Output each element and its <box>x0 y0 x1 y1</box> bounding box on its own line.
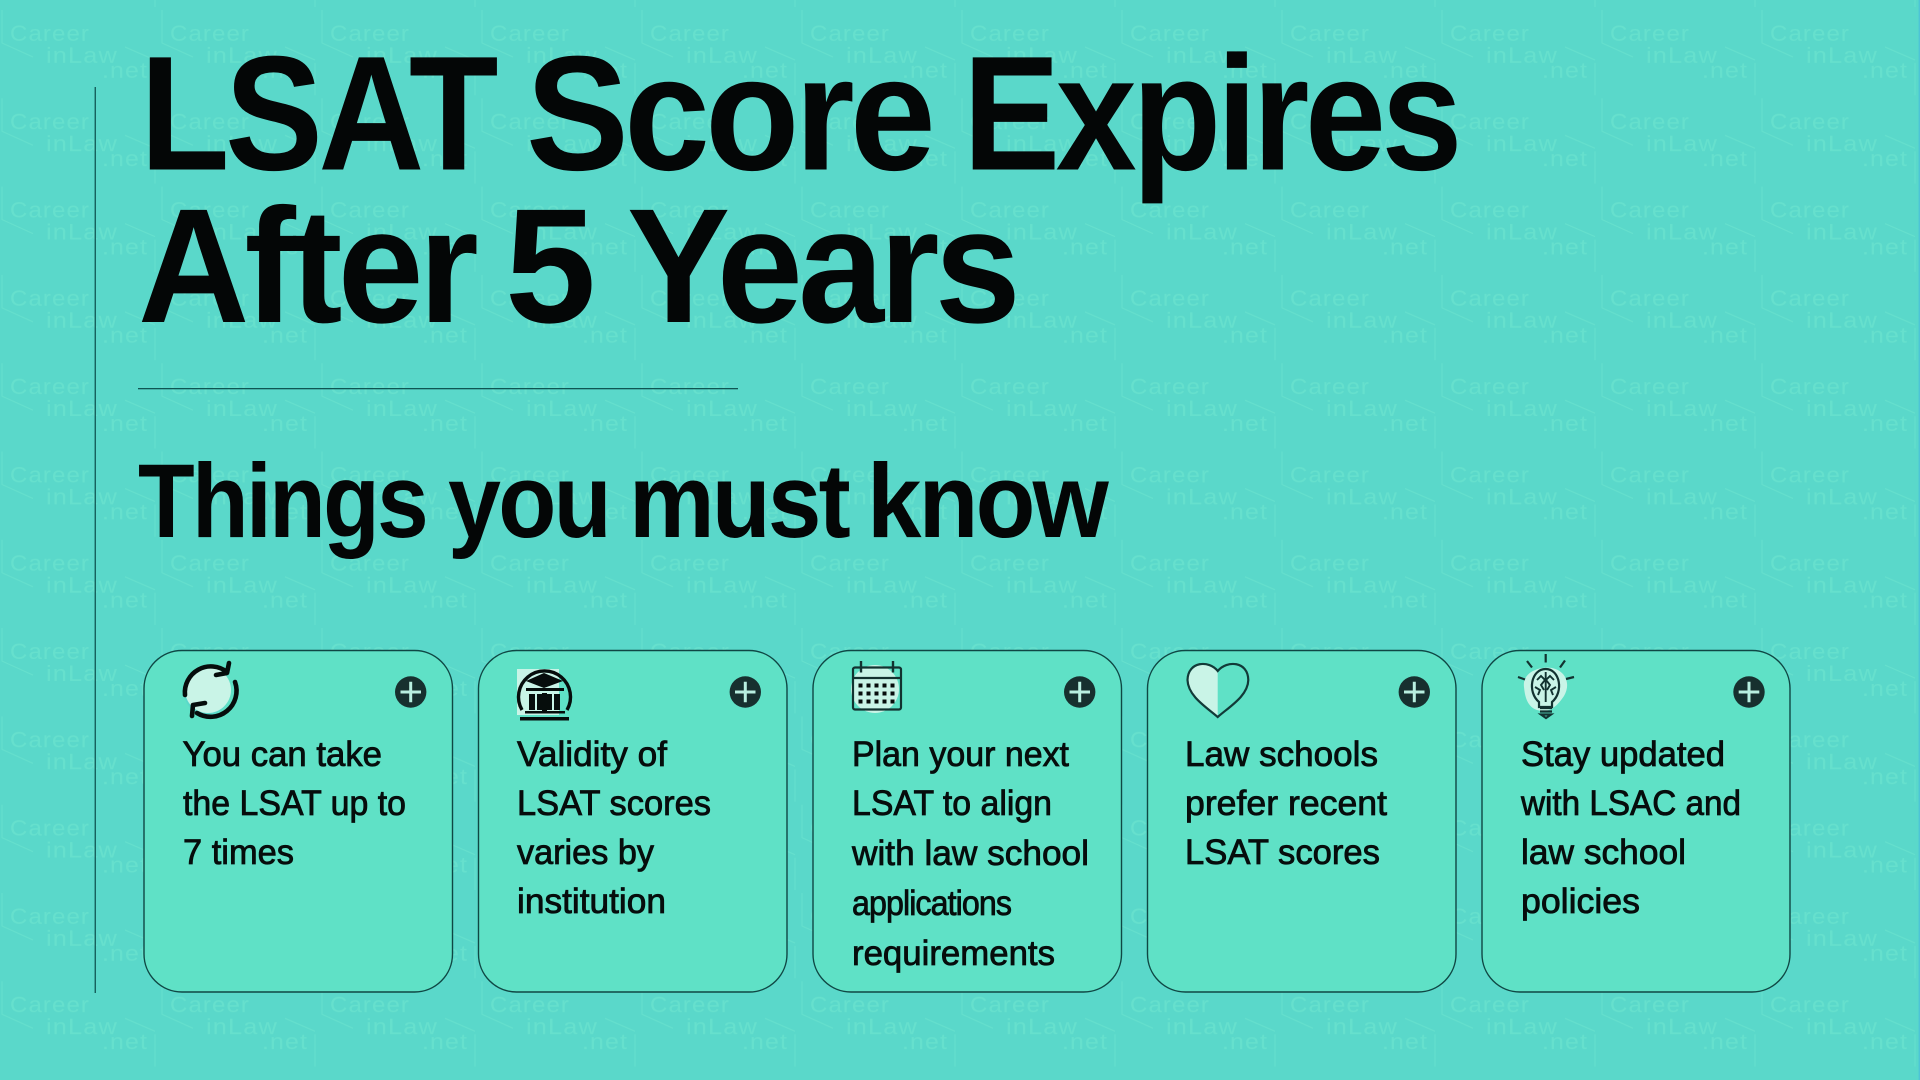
card text: You can take <box>182 735 382 774</box>
card text <box>1185 735 1387 872</box>
title: 5 <box>505 174 592 357</box>
title <box>138 22 1458 357</box>
card text: with LSAC and <box>1520 784 1741 823</box>
card text: Plan your next <box>852 735 1069 774</box>
card text: LSAT scores <box>517 784 711 823</box>
card text: LSAT to align <box>852 784 1052 823</box>
icon: institution building <box>517 669 570 720</box>
card text: Stay updated <box>1521 735 1725 774</box>
divider <box>138 388 738 389</box>
icon: plus button <box>730 676 761 708</box>
icon: plus button <box>1733 676 1765 708</box>
subheading: must <box>629 443 850 560</box>
card text: policies <box>1521 882 1640 921</box>
title: After <box>138 174 476 357</box>
panel: card 4 <box>1148 650 1456 992</box>
card text: requirements <box>852 934 1055 973</box>
icon: plus button <box>1064 676 1095 708</box>
icon: heart <box>1188 664 1248 718</box>
card text: prefer recent <box>1185 784 1387 823</box>
title: Years <box>627 174 1016 357</box>
card text: Validity of <box>517 735 667 774</box>
card text: LSAT scores <box>1185 833 1380 872</box>
panel: card 1 <box>144 650 452 992</box>
icon: plus button <box>1399 676 1430 708</box>
card text <box>517 735 711 921</box>
panel: card 3 <box>813 650 1122 992</box>
title: LSAT <box>140 22 497 204</box>
icon: calendar <box>851 661 901 713</box>
title: Score <box>526 22 931 204</box>
card text: institution <box>517 882 666 921</box>
icon: plus button <box>395 676 426 708</box>
card text <box>1520 735 1741 921</box>
card text <box>851 735 1089 973</box>
card text: varies by <box>517 833 654 872</box>
card text: Law schools <box>1185 735 1378 774</box>
panel: card 5 <box>1482 650 1790 992</box>
card text: with law school <box>851 834 1089 873</box>
subheading: you <box>448 443 609 560</box>
subheading: Things <box>138 443 426 560</box>
panel: card 2 <box>478 650 787 992</box>
icon: light bulb with brain <box>1518 654 1574 718</box>
vertical rule <box>95 87 96 993</box>
subheading: know <box>867 443 1109 560</box>
card text: applications <box>852 884 1011 923</box>
card text: law school <box>1521 833 1686 872</box>
title: Expires <box>963 22 1458 204</box>
card text: 7 times <box>183 833 294 872</box>
subheading <box>138 443 1109 560</box>
card text <box>182 735 406 872</box>
card text: the LSAT up to <box>183 784 406 823</box>
icon: refresh arrows <box>184 663 237 717</box>
